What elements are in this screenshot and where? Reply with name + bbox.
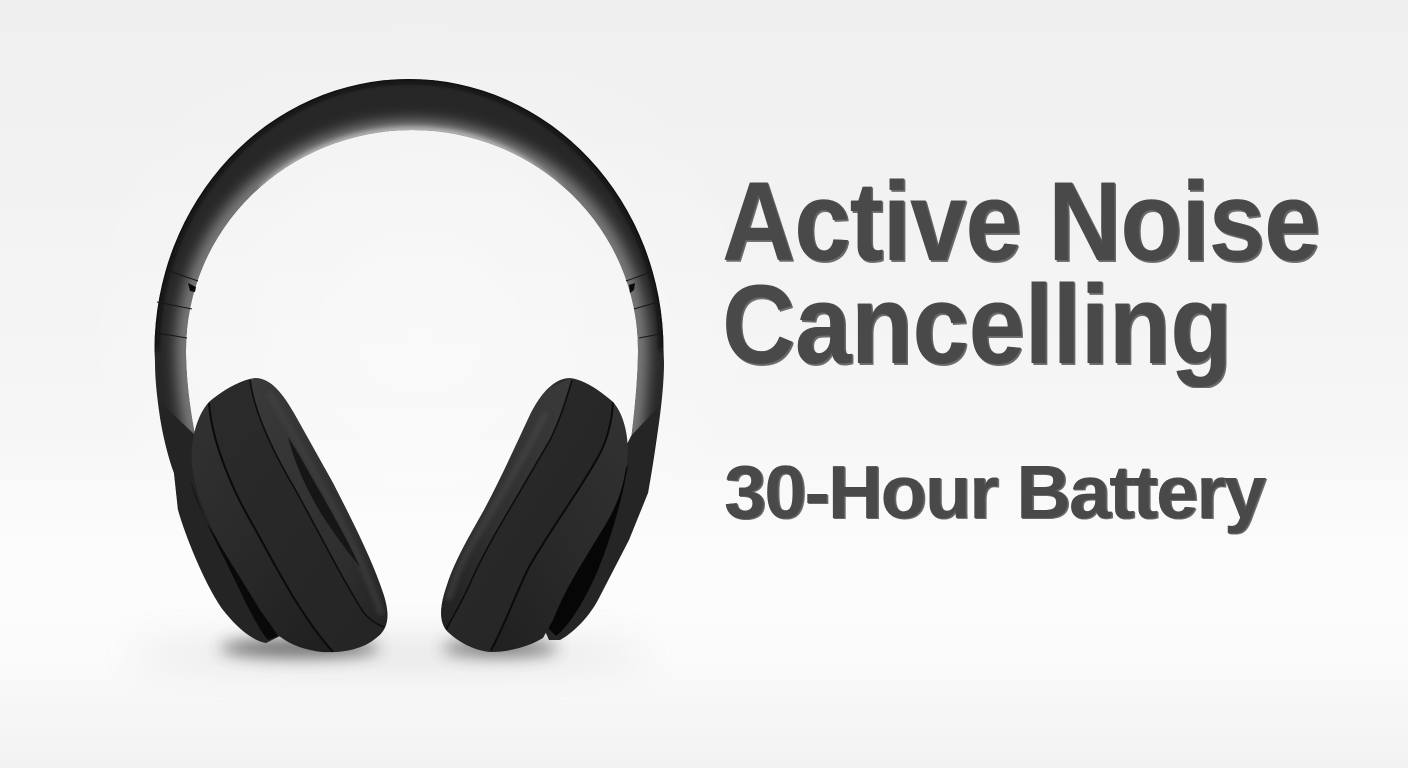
left ear cup — [192, 378, 400, 652]
soft floor shadow — [130, 643, 650, 667]
right cushion band — [436, 378, 613, 652]
headband — [154, 79, 664, 510]
right rim highlight — [448, 412, 546, 600]
hinge: left — [157, 270, 198, 338]
left cushion band — [209, 378, 400, 652]
right arm dark gap — [545, 465, 628, 636]
right front rim — [430, 378, 572, 630]
left ear opening — [288, 437, 360, 567]
left front rim — [250, 378, 395, 630]
hinge: right — [626, 272, 660, 338]
right yoke arm — [540, 405, 660, 640]
subheading: 30-Hour Battery: 30-Hour Battery — [724, 450, 1264, 534]
right grooves — [491, 402, 613, 650]
left rim highlight — [314, 473, 384, 614]
contact shadow: left ear cup — [220, 639, 380, 657]
contact shadow: right ear cup — [442, 640, 558, 656]
right ear cup — [430, 378, 628, 652]
left grooves — [209, 403, 333, 652]
background glow — [60, 0, 780, 680]
left yoke arm — [158, 400, 280, 643]
heading: Active Noise: Active Noise — [722, 159, 1319, 284]
heading: Cancelling: Cancelling — [722, 262, 1232, 387]
left arm dark gap — [190, 480, 278, 640]
headphones illustration — [154, 79, 664, 675]
